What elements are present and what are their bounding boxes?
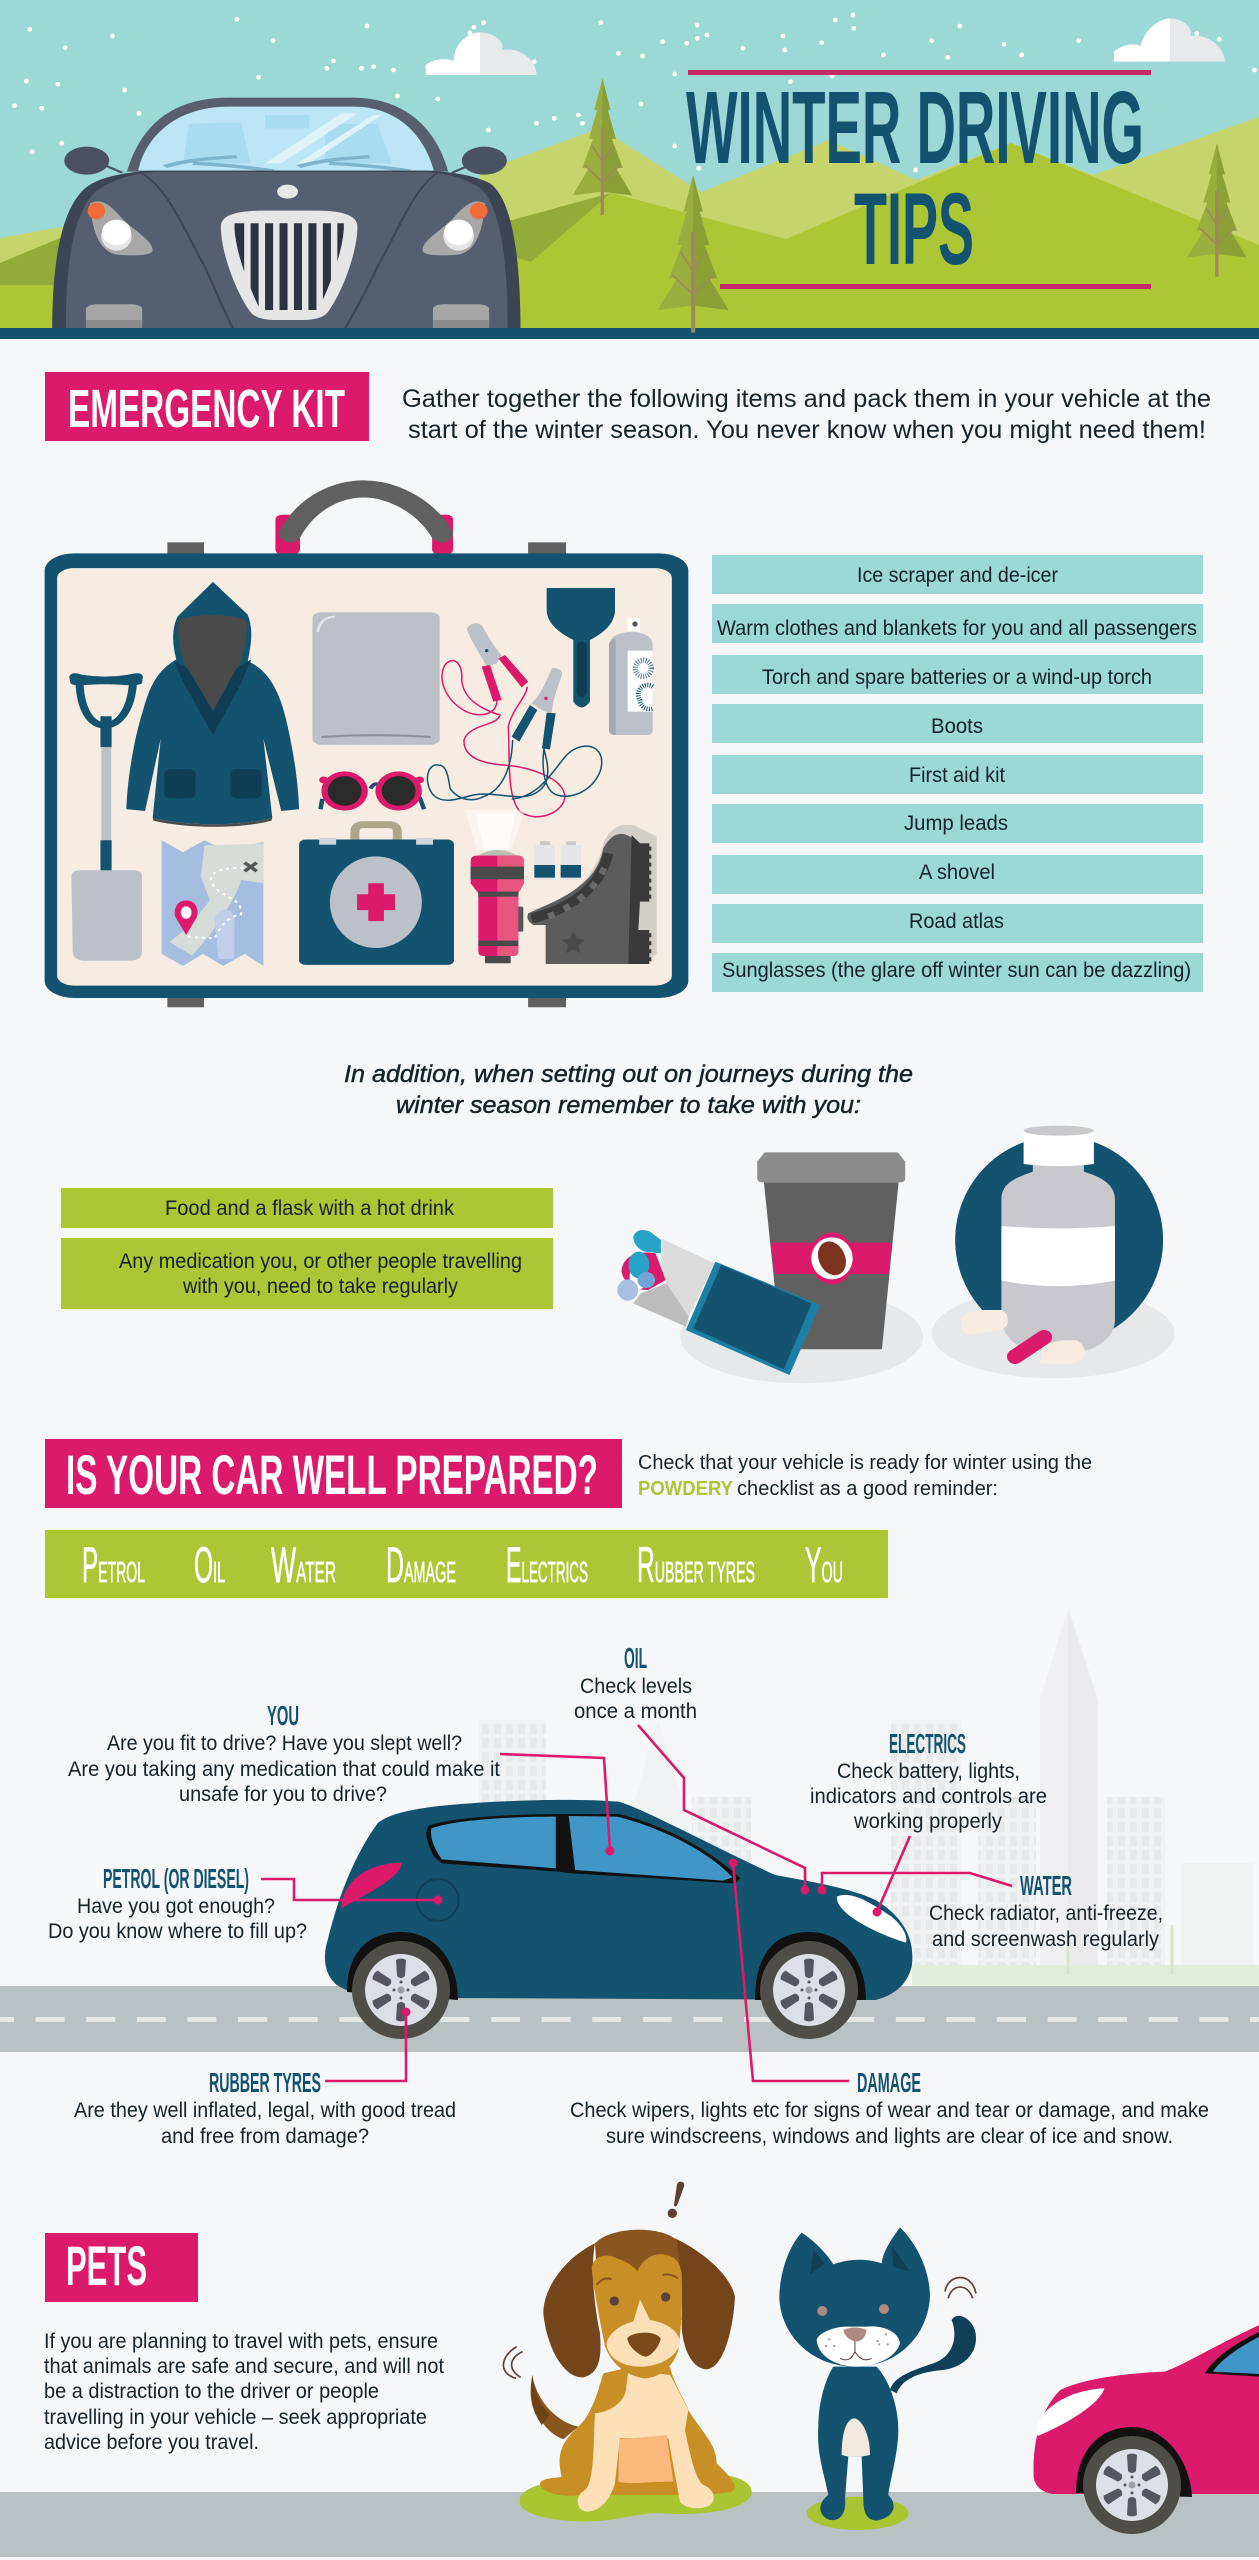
powdery intro text: checklist as a good reminder: (737, 1478, 998, 1500)
snack wrapper (617, 1230, 820, 1375)
callout: you: Are you fit to drive? Have you slept well? (107, 1732, 462, 1755)
left headlight (86, 201, 153, 328)
item 3 (712, 655, 1203, 694)
you: YOU (805, 1537, 843, 1593)
green item: food and flask: Food and a flask with a hot drink (165, 1197, 454, 1220)
petrol: PETROL (82, 1537, 145, 1593)
blanket (312, 612, 440, 745)
journey subheading: winter season remember to take with you: (396, 1092, 861, 1119)
header illustration (0, 0, 1259, 339)
green item: medication (61, 1238, 553, 1309)
callout: damage: sure windscreens, windows and lights are clear of ice and snow. (606, 2125, 1173, 2148)
pets paragraph: be a distraction to the driver or people (44, 2380, 379, 2403)
chest (578, 2370, 714, 2512)
handle (275, 489, 453, 554)
windows (426, 1814, 741, 1883)
green item: medication: with you, need to take regularly (182, 1275, 458, 1298)
muzzle (607, 2299, 680, 2367)
snow dots (12, 13, 1257, 172)
medicine bottle (1001, 1126, 1115, 1351)
powdery intro text: Check that your vehicle is ready for winter using the (638, 1452, 1092, 1474)
callout: damage (570, 2067, 1209, 2148)
item 8: Road atlas (909, 910, 1004, 933)
callout: rubber tyres: and free from damage? (161, 2125, 369, 2148)
callout: water: Check radiator, anti-freeze, (929, 1902, 1163, 1925)
torch (465, 810, 525, 963)
rear wheel (352, 1941, 450, 2039)
city skyline background (479, 1608, 1259, 1986)
callout: oil: Check levels (580, 1675, 692, 1698)
item 3: Torch and spare batteries or a wind-up torch (762, 666, 1152, 689)
callout: electrics (810, 1728, 1047, 1833)
case (45, 553, 688, 998)
callout: rubber tyres: Are they well inflated, legal, with good tread (74, 2099, 456, 2122)
lower road (0, 2492, 1259, 2557)
item 5 (712, 755, 1203, 794)
de-icer can (609, 618, 653, 735)
green item: medication: Any medication you, or other people travelling (119, 1250, 522, 1273)
section heading: emergency kit (45, 372, 369, 441)
pets paragraph: that animals are safe and secure, and will not (44, 2355, 444, 2378)
kit items: right side (427, 588, 657, 964)
pets paragraph: advice before you travel. (44, 2431, 259, 2454)
pets paragraph: travelling in your vehicle – seek appropriate (44, 2406, 427, 2429)
intro text: Gather together the following items and pack them in your vehicle at the (402, 385, 1211, 413)
intro text (402, 385, 1211, 444)
item 1 (712, 555, 1203, 594)
callout: petrol: PETROL (OR DIESEL) (103, 1863, 249, 1894)
blue hatchback car (325, 1800, 912, 2039)
mat (807, 2497, 909, 2530)
body (540, 2367, 735, 2496)
exclamation mark (668, 2182, 684, 2218)
callout: you: Are you taking any medication that could make it (68, 1758, 500, 1781)
title (686, 70, 1151, 289)
powdery checklist bar (45, 1530, 888, 1598)
callout: rubber tyres (74, 2067, 456, 2148)
pets paragraph: If you are planning to travel with pets, ensure (44, 2330, 438, 2353)
cat (779, 2227, 976, 2530)
callout: water: and screenwash regularly (932, 1928, 1159, 1951)
oil: OIL (194, 1537, 225, 1593)
section heading: emergency kit: EMERGENCY KIT (68, 379, 345, 439)
callout: petrol (48, 1863, 307, 1943)
callout: water (929, 1870, 1163, 1951)
mat (520, 2474, 752, 2522)
classic car, front view (52, 98, 520, 328)
road markings (0, 2017, 1259, 2022)
ears (543, 2243, 600, 2377)
pink car (1034, 2325, 1259, 2534)
tail (890, 2316, 976, 2393)
powdery intro text (638, 1452, 1092, 1500)
item 4: Boots (931, 715, 983, 738)
callout: electrics: working properly (853, 1810, 1002, 1833)
powdery intro text: POWDERY (638, 1478, 734, 1500)
hills (0, 117, 1259, 330)
callout: petrol: Have you got enough? (77, 1895, 275, 1918)
spare batteries (534, 841, 581, 880)
jacket (126, 582, 299, 827)
dog (503, 2182, 752, 2522)
head (595, 2230, 682, 2320)
callout: damage: Check wipers, lights etc for signs of wear and tear or damage, and make (570, 2099, 1209, 2122)
callout: rubber tyres: RUBBER TYRES (209, 2067, 321, 2098)
intro text: start of the winter season. You never know when you might need them! (408, 416, 1206, 444)
item 8 (712, 904, 1203, 943)
tail (532, 2375, 578, 2439)
badge (277, 185, 298, 199)
suitcase with kit items (45, 489, 688, 1007)
item 2 (712, 604, 1203, 643)
item 7: A shovel (919, 861, 995, 884)
road atlas (162, 840, 263, 966)
item 4 (712, 704, 1203, 743)
green item: food and flask (61, 1188, 553, 1228)
first aid kit (299, 825, 454, 965)
shadow (680, 1290, 923, 1383)
callout: electrics: Check battery, lights, (837, 1760, 1020, 1783)
journey subheading (344, 1061, 913, 1119)
latches (167, 542, 566, 1007)
callout: oil: OIL (624, 1643, 647, 1675)
wag lines (945, 2277, 976, 2298)
headlight (837, 1895, 906, 1943)
callout: you (68, 1700, 500, 1806)
title: TIPS (854, 172, 974, 286)
shovel (69, 673, 143, 961)
sky (0, 0, 1259, 330)
callout: electrics: indicators and controls are (810, 1785, 1047, 1808)
pine trees (573, 78, 1247, 333)
wing mirrors (64, 147, 507, 175)
wag lines (503, 2347, 523, 2378)
sunglasses (319, 771, 424, 811)
ice scraper (547, 588, 615, 707)
bonnet lines (141, 173, 438, 328)
damage: DAMAGE (386, 1537, 456, 1593)
road band (0, 328, 1259, 339)
road (0, 1986, 1259, 2052)
electrics: ELECTRICS (506, 1537, 588, 1593)
item 2: Warm clothes and blankets for you and all passengers (717, 617, 1197, 640)
right headlight (422, 201, 489, 328)
item 1: Ice scraper and de-icer (857, 564, 1058, 587)
car body (52, 171, 520, 328)
journey subheading: In addition, when setting out on journeys during the (344, 1061, 913, 1088)
pointer dots (402, 1846, 882, 2016)
body (818, 2367, 898, 2521)
callout: water: WATER (1020, 1870, 1072, 1901)
head (779, 2227, 930, 2367)
item 9 (712, 953, 1203, 992)
shadow 2 (932, 1288, 1175, 1378)
muzzle (817, 2326, 900, 2367)
pointer lines (261, 1725, 1012, 2081)
callout: you: unsafe for you to drive? (179, 1783, 387, 1806)
item 7 (712, 855, 1203, 894)
roof (127, 98, 448, 172)
fuel flap (417, 1879, 459, 1921)
callout: you: YOU (267, 1700, 299, 1731)
nose (627, 2333, 661, 2357)
boot (527, 825, 657, 964)
callout: electrics: ELECTRICS (889, 1728, 966, 1759)
clouds (426, 18, 1225, 75)
section heading: is your car well prepared: IS YOUR CAR WELL PREPARED? (66, 1443, 598, 1506)
pills (960, 1310, 1085, 1364)
item 9: Sunglasses (the glare off winter sun can be dazzling) (722, 959, 1191, 982)
coffee cup (757, 1152, 905, 1349)
callout: damage: DAMAGE (857, 2067, 921, 2098)
callout: oil: once a month (574, 1700, 697, 1723)
windscreen (138, 107, 434, 171)
callout: oil (574, 1643, 697, 1723)
food and flask illustration (617, 1126, 1175, 1383)
brows (597, 2274, 678, 2285)
item 6 (712, 804, 1203, 843)
checklist: emergency kit items (712, 555, 1203, 992)
item 5: First aid kit (909, 764, 1005, 787)
car body (325, 1800, 912, 2000)
rubber tyres: RUBBER TYRES (637, 1537, 755, 1593)
pets paragraph (44, 2330, 444, 2454)
item 6: Jump leads (904, 812, 1008, 835)
section heading: is your car well prepared (45, 1439, 622, 1508)
wheel arches (347, 1932, 866, 2000)
eyes (817, 2306, 827, 2316)
jump leads (427, 623, 602, 817)
callout: petrol: Do you know where to fill up? (48, 1920, 307, 1943)
blue disc (955, 1136, 1163, 1344)
front wheel (760, 1941, 858, 2039)
eyes (610, 2296, 619, 2306)
water: WATER (271, 1537, 336, 1593)
section heading: pets: PETS (66, 2234, 147, 2297)
pink swoosh (341, 1863, 402, 1908)
radiator grille (221, 211, 357, 320)
